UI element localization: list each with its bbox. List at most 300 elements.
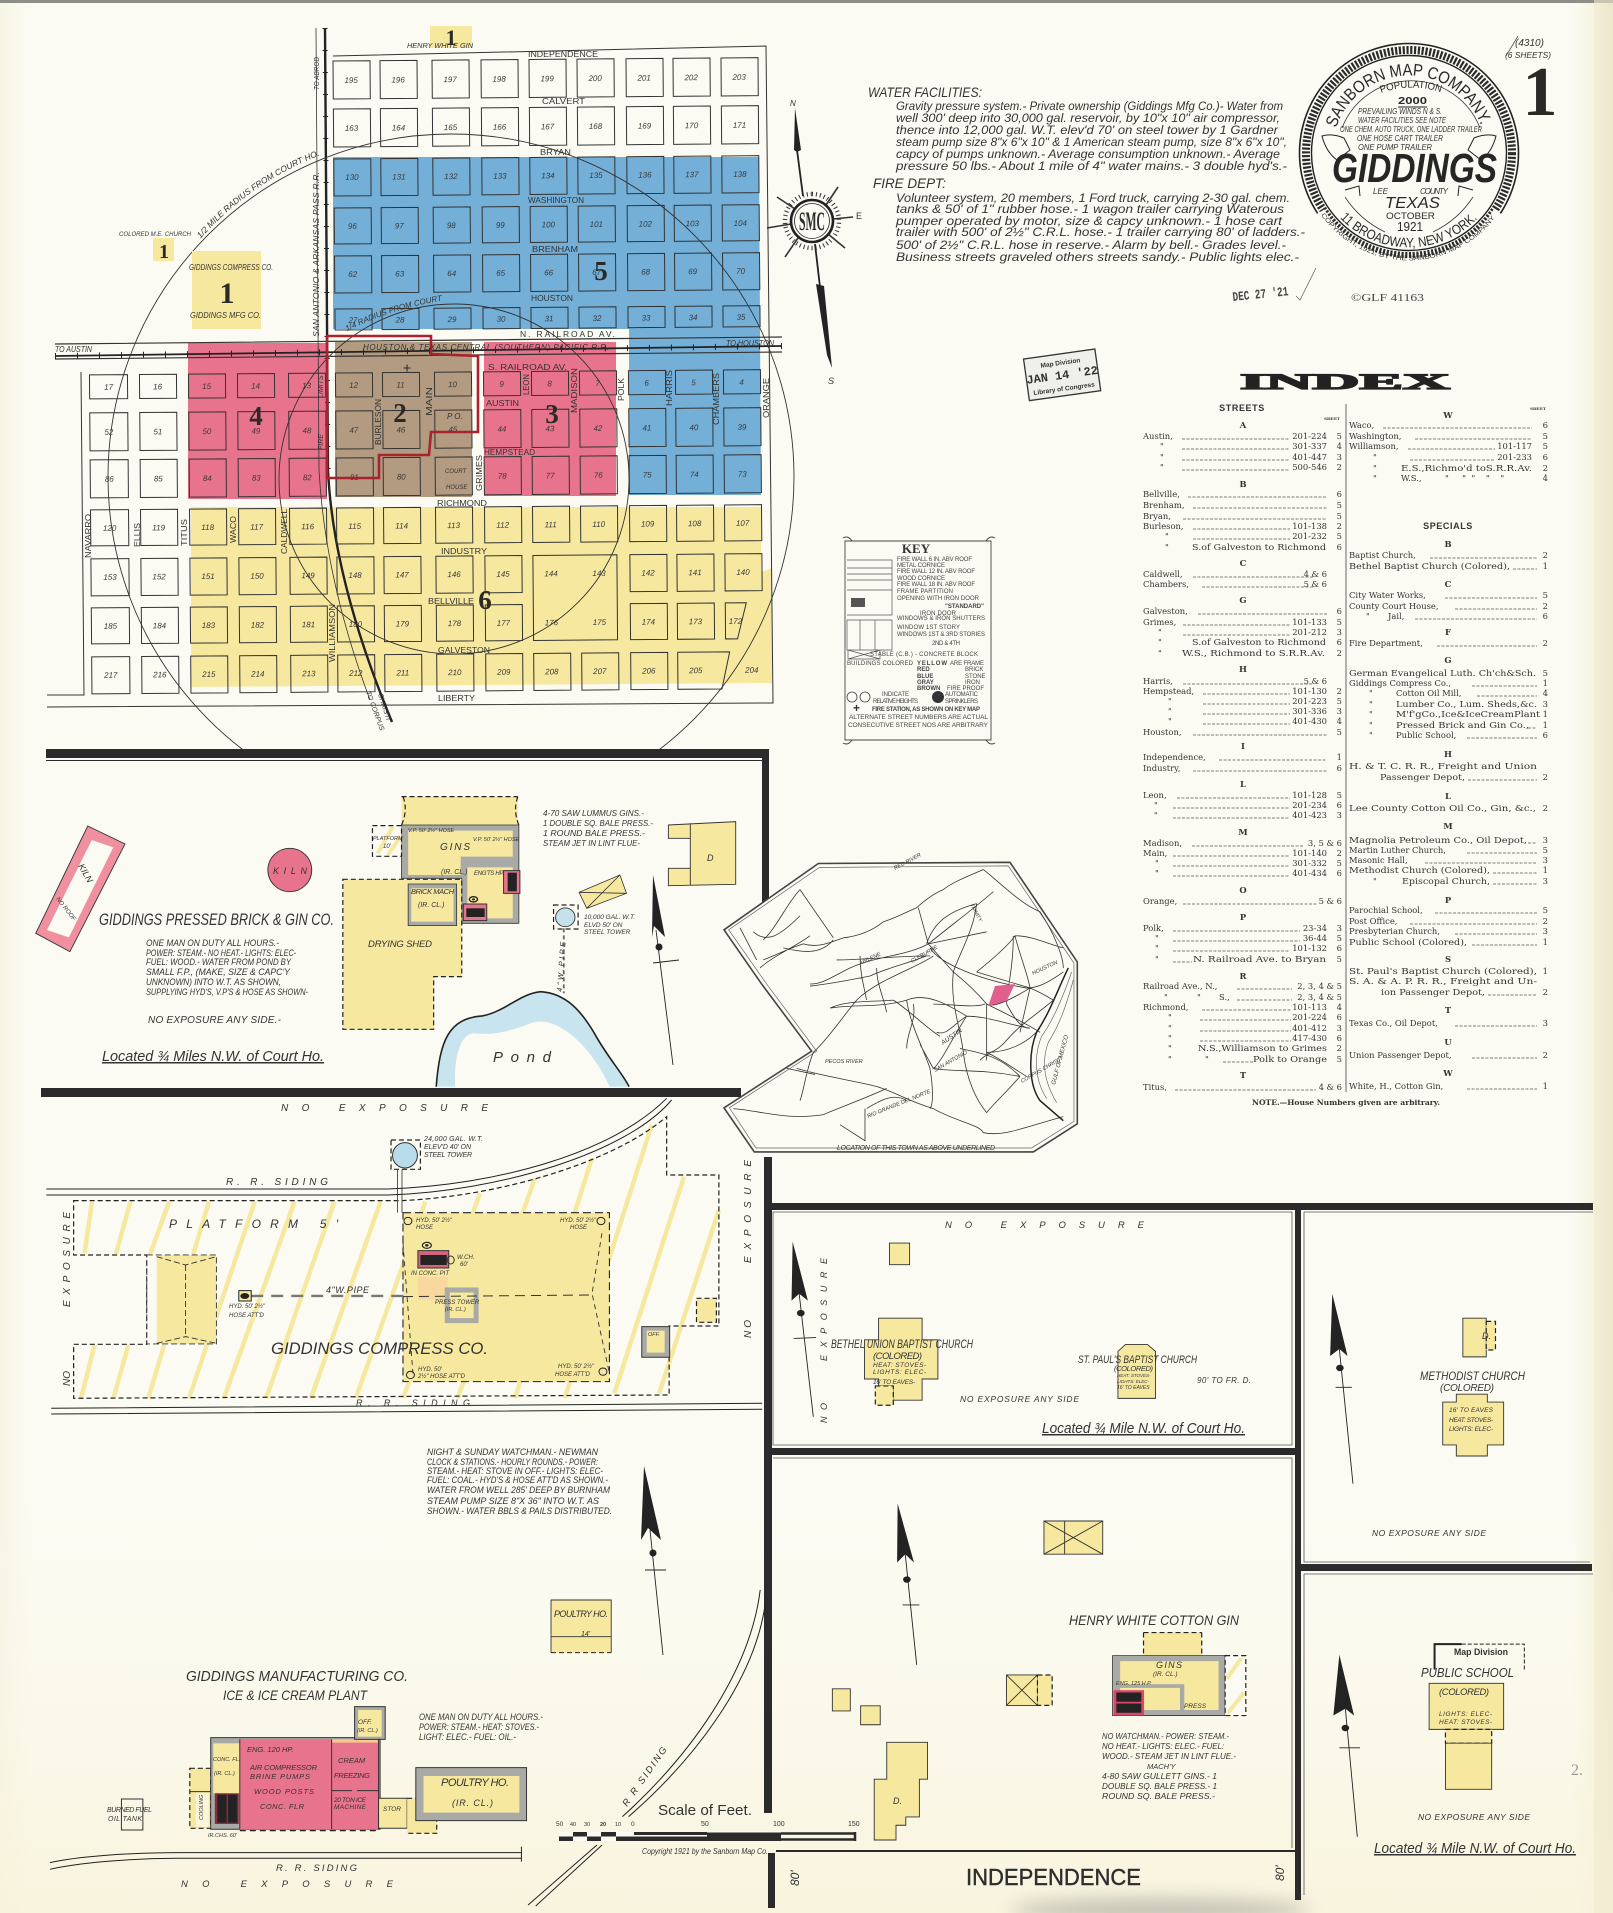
specials column: 2: [1543, 638, 1548, 648]
street names: BRYAN: [540, 147, 571, 157]
railway and radius labels: LIMITS: [318, 375, 325, 398]
block numbers: 173: [689, 617, 703, 626]
streets column: 5: [1337, 511, 1342, 521]
texas locator map: CLEBURNE: [910, 944, 939, 965]
compress labels: 2½" HOSE ATT'D: [417, 1373, 466, 1380]
streets column: Brenham,: [1143, 500, 1184, 510]
block numbers: 81: [350, 473, 359, 482]
specials column: 2: [1543, 772, 1548, 782]
streets column: G: [1239, 595, 1247, 605]
compass and north arrow: N: [790, 99, 796, 108]
streets column: 401-412: [1292, 1023, 1327, 1033]
specials column: W: [1442, 1068, 1453, 1078]
compress labels: HYD. 50': [418, 1367, 443, 1373]
gin labels: KILN: [273, 866, 308, 876]
streets column: H: [1239, 664, 1247, 674]
block numbers: 132: [444, 172, 458, 181]
specials column: 2: [1543, 916, 1548, 926]
block numbers: 41: [642, 424, 651, 433]
street names: INDUSTRY: [441, 546, 487, 556]
church and gin labels: D.: [1482, 1331, 1491, 1341]
key legend: STONE: [965, 674, 986, 680]
streets column: Leon,: [1143, 790, 1167, 800]
street names: WACO: [228, 516, 238, 543]
compress labels: EXPOSURE: [743, 1160, 754, 1263]
church and gin labels: 4-80 SAW GULLETT GINS.- 1: [1102, 1771, 1217, 1781]
block numbers: 183: [202, 621, 216, 630]
specials column: Bethel Baptist Church (Colored),: [1349, 561, 1510, 571]
church and gin labels: NO EXPOSURE ANY SIDE: [960, 1394, 1079, 1404]
block numbers: 29: [447, 315, 457, 324]
key legend: BROWN: [917, 686, 940, 692]
streets column: 5: [1337, 858, 1342, 868]
compress labels: FUEL: COAL.- HYD'S & HOSE ATT'D AS SHOWN.-: [427, 1475, 608, 1485]
specials column: ": [1369, 720, 1373, 730]
gin labels: D: [707, 853, 714, 863]
streets column: ": [1155, 868, 1159, 878]
block numbers: 83: [252, 474, 261, 483]
key legend: ALTERNATE STREET NUMBERS ARE ACTUAL: [849, 714, 988, 721]
streets column: ": [1168, 1012, 1172, 1022]
block numbers: 7: [595, 379, 600, 388]
block numbers: 206: [641, 666, 656, 676]
block numbers: 8: [547, 379, 552, 388]
church and gin labels: 90' TO FR. D.: [1197, 1376, 1251, 1385]
library stamp: Map Division: [1040, 357, 1081, 370]
numbered blocks: [87, 58, 763, 694]
water facilities and fire department notes: steam pump size 8"x 6"x 10" & 1 American steam pump, size 8"x 6"x 10",: [896, 137, 1287, 149]
compress labels: WATER FROM WELL 285' DEEP BY BURNHAM: [427, 1485, 610, 1495]
gin buildings: [36, 797, 736, 1087]
block numbers: 179: [396, 619, 410, 629]
title cartouche: GIDDINGS: [1332, 145, 1497, 191]
index heading: INDEX: [1240, 369, 1450, 394]
plant labels: BRINE PUMPS: [250, 1772, 310, 1781]
plant labels: 14': [581, 1631, 591, 1638]
streets column: 5: [1337, 500, 1342, 510]
streets column: ": [1205, 1054, 1209, 1064]
outlying sheet references: GIDDINGS COMPRESS CO.: [189, 263, 273, 272]
church and gin labels: 16' TO EAVES: [1449, 1407, 1494, 1414]
key legend: ARE FRAME: [950, 661, 984, 667]
plant labels: WOOD POSTS: [254, 1787, 314, 1796]
streets column: 4 & 6: [1304, 569, 1327, 579]
church and gin labels: LIGHTS: ELEC-: [1449, 1426, 1494, 1433]
fire limits boundary: [327, 336, 478, 478]
title cartouche: ONE PUMP TRAILER: [1358, 142, 1432, 152]
index footnote: NOTE.—House Numbers given are arbitrary.: [1252, 1098, 1440, 1107]
specials column: Episcopal Church,: [1402, 876, 1490, 886]
block numbers: 104: [734, 219, 748, 228]
church and gin labels: (COLORED): [873, 1351, 922, 1362]
railway and radius labels: TO ABROD: [312, 57, 321, 90]
block numbers: 113: [447, 521, 461, 530]
water facilities and fire department notes: trailer with 500' of 2½" C.R.L. hose.- 1 trailer carrying 80' of ladders.-: [896, 227, 1305, 239]
plant labels: R. R. SIDING: [276, 1863, 357, 1874]
streets column: S.of Galveston to Richmond: [1192, 637, 1327, 647]
plant labels: ONE MAN ON DUTY ALL HOURS.-: [419, 1712, 543, 1722]
block numbers: 108: [688, 519, 702, 528]
block numbers: 13: [302, 381, 312, 390]
compress drawing: [46, 1098, 762, 1414]
specials column: Washington,: [1349, 431, 1401, 441]
church and gin labels: Located ¾ Mile N.W. of Court Ho.: [1042, 1420, 1245, 1437]
compress labels: IN CONC. PIT: [411, 1271, 450, 1277]
key legend: BRICK: [965, 667, 983, 673]
block numbers: 142: [641, 568, 655, 578]
church and gin labels: HEAT: STOVES-: [1449, 1417, 1494, 1424]
gin labels: STEAM JET IN LINT FLUE-: [543, 838, 640, 848]
streets column: 101-133: [1292, 617, 1327, 627]
plant labels: IR.CHS. 60': [208, 1833, 238, 1839]
specials column: 5: [1543, 441, 1548, 451]
block numbers: 30: [497, 315, 506, 324]
specials column: 2: [1543, 601, 1548, 611]
streets column: Madison,: [1143, 838, 1182, 848]
streets column: 4: [1337, 716, 1342, 726]
church and gin labels: HEAT: STOVES-: [873, 1362, 927, 1369]
specials column: S: [1445, 954, 1451, 964]
plant labels: OFF.: [358, 1719, 372, 1726]
texas locator map: LOCATION OF THIS TOWN AS ABOVE UNDERLINED: [837, 1145, 995, 1152]
plant labels: 20 TON ICE: [333, 1797, 367, 1804]
plant labels: CONC. FLR: [260, 1802, 305, 1811]
block numbers: 114: [395, 521, 409, 531]
outlying sheet references: [119, 25, 474, 329]
block numbers: 49: [251, 427, 261, 436]
block numbers: 74: [690, 470, 699, 479]
block numbers: 134: [541, 171, 555, 180]
key legend: FIRE WALL 18 IN. ABV ROOF: [897, 582, 975, 588]
street names: LIBERTY: [438, 693, 475, 703]
streets column: ": [1154, 800, 1158, 810]
plant labels: CONC. FL.: [213, 1757, 240, 1763]
block numbers: 42: [593, 424, 603, 433]
block numbers: 107: [736, 519, 750, 528]
streets column: ": [1168, 706, 1172, 716]
water facilities and fire department notes: FIRE DEPT:: [873, 175, 946, 191]
title cartouche: COUNTY: [1420, 187, 1449, 196]
sheet number and count: (4310): [1515, 38, 1544, 49]
key legend: STABLE (C.B.) - CONCRETE BLOCK: [870, 652, 978, 658]
key legend: OPENING WITH IRON DOOR: [897, 596, 980, 602]
block numbers: 118: [201, 523, 215, 532]
streets column: 101-132: [1292, 943, 1327, 953]
specials column: P: [1445, 895, 1452, 905]
specials column: 3: [1543, 835, 1548, 845]
streets column: Main,: [1143, 848, 1167, 858]
street names: HEMPSTEAD: [484, 447, 535, 457]
title cartouche: WATER FACILITIES SEE NOTE: [1358, 115, 1446, 125]
sheet numerals: 3: [545, 399, 559, 429]
specials column: Pressed Brick and Gin Co.,: [1396, 720, 1529, 730]
plant labels: GIDDINGS MANUFACTURING CO.: [186, 1668, 408, 1685]
block numbers: 97: [395, 221, 404, 231]
streets column: 401-423: [1292, 810, 1327, 820]
church and gin labels: 80': [788, 1870, 802, 1886]
specials column: White, H., Cotton Gin,: [1349, 1081, 1443, 1091]
street names: S. RAILROAD AV.: [488, 362, 567, 372]
streets column: 6: [1337, 637, 1342, 647]
specials column: U: [1444, 1037, 1452, 1047]
street and railway lines: [47, 28, 782, 707]
water facilities and fire department notes: Gravity pressure system.- Private ownership (Giddings Mfg Co.)- Water from: [896, 101, 1283, 113]
street names: ELLIS: [132, 523, 142, 547]
streets column: 301-332: [1292, 858, 1327, 868]
scale of feet: 10: [615, 1822, 621, 1828]
streets column: 201-212: [1292, 627, 1327, 637]
key legend: YELLOW: [917, 661, 947, 667]
streets column: Grimes,: [1143, 617, 1176, 627]
railway and radius labels: CHRISTI: [376, 692, 391, 721]
church and gin labels: EXPOSURE: [819, 1257, 829, 1361]
block numbers: 144: [544, 569, 558, 578]
specials column: 5: [1543, 431, 1548, 441]
compress labels: STEAM PUMP SIZE 8"X 36" INTO W.T. AS: [427, 1496, 599, 1506]
streets column: S.,: [1219, 992, 1230, 1002]
street names: BRENHAM: [532, 244, 578, 254]
streets column: 301-336: [1292, 706, 1327, 716]
streets column: 6: [1337, 868, 1342, 878]
specials column: ": [1369, 730, 1373, 740]
streets column: ": [1168, 1023, 1172, 1033]
streets column: 3: [1337, 923, 1342, 933]
block numbers: 137: [685, 170, 699, 179]
streets column: 3: [1337, 1023, 1342, 1033]
block numbers: 215: [201, 670, 216, 679]
block numbers: 28: [395, 315, 405, 325]
compress labels: ELEV'D 40' ON: [424, 1144, 472, 1151]
streets column: 6: [1337, 542, 1342, 552]
water facilities and fire department notes: WATER FACILITIES:: [868, 84, 982, 100]
block numbers: 80: [397, 472, 406, 482]
block numbers: 111: [545, 520, 557, 529]
block numbers: 102: [639, 219, 653, 229]
streets column: 101-130: [1292, 686, 1327, 696]
library stamp: [1024, 349, 1101, 401]
outlying sheet references: 1: [220, 277, 234, 310]
streets column: 4: [1337, 441, 1342, 451]
streets column: P: [1240, 912, 1247, 922]
plant labels: BURNED FUEL: [107, 1807, 152, 1814]
block numbers: 202: [683, 73, 698, 82]
specials column: 3: [1543, 855, 1548, 865]
scale of feet: 30: [584, 1822, 590, 1828]
block numbers: 103: [686, 219, 700, 228]
texas locator map: PECOS RIVER: [825, 1059, 863, 1065]
streets column: ": [1155, 858, 1159, 868]
specials column: 201-233: [1497, 452, 1532, 462]
gin labels: 4-70 SAW LUMMUS GINS.-: [543, 808, 644, 818]
block numbers: 180: [349, 620, 363, 629]
specials column: 2: [1543, 550, 1548, 560]
block numbers: 152: [152, 572, 166, 581]
compress labels: R. R. SIDING: [356, 1398, 470, 1408]
specials column: Passenger Depot,: [1380, 772, 1465, 782]
plant labels: AIR COMPRESSOR: [249, 1763, 318, 1772]
compress labels: EXPOSURE: [62, 1212, 73, 1307]
specials column: Waco,: [1349, 420, 1374, 430]
block numbers: 203: [731, 73, 746, 82]
plant labels: OIL TANK: [108, 1816, 142, 1823]
sheet numerals: 6: [478, 585, 492, 615]
streets column: Austin,: [1142, 431, 1173, 441]
sheet numerals: 2: [393, 398, 407, 428]
railway and radius labels: TO CORPUS: [364, 690, 385, 732]
streets column: 6: [1337, 489, 1342, 499]
panel: churches and gin buildings: [788, 1220, 1583, 1890]
streets column: 201-223: [1292, 696, 1327, 706]
streets column: ": [1155, 954, 1159, 964]
streets column: 4 & 6: [1319, 1082, 1342, 1092]
block numbers: 85: [154, 474, 163, 483]
specials column: Lumber Co., Lum. Sheds,&c.: [1396, 699, 1537, 709]
key legend: WINDOW 1ST STORY: [897, 625, 960, 631]
streets column: R: [1240, 971, 1248, 981]
specials column: City Water Works,: [1349, 590, 1426, 600]
streets column: 5: [1337, 431, 1342, 441]
church and gin labels: HEAT: STOVES-: [1439, 1719, 1493, 1726]
gin labels: V.P. 50' 2½" HOSE: [473, 836, 520, 843]
streets column: ": [1164, 992, 1168, 1002]
church and gin labels: WOOD.- STEAM JET IN LINT FLUE.-: [1102, 1751, 1236, 1761]
streets column: Orange,: [1143, 896, 1177, 906]
block numbers: 62: [348, 270, 358, 279]
block numbers: 101: [590, 220, 603, 229]
key legend: FRAME PARTITION: [897, 589, 953, 595]
scale of feet: [556, 1802, 860, 1856]
water facilities and fire department notes: thence into 12,000 gal. W.T. elev'd 70' on steel tower by 1 Gardner: [896, 125, 1279, 137]
specials column: Williamson,: [1349, 441, 1399, 451]
date and copyright stamps: ©GLF 41163: [1351, 293, 1424, 304]
compress labels: STEEL TOWER: [424, 1152, 472, 1159]
gin labels: FUEL: WOOD.- WATER FROM POND BY: [146, 957, 292, 967]
date and copyright stamps: [1232, 268, 1424, 305]
block numbers: 44: [497, 425, 507, 434]
specials column: H: [1444, 749, 1452, 759]
compress labels: HOSE ATT'D: [555, 1372, 590, 1378]
block numbers: 213: [301, 669, 316, 678]
plant labels: MACHINE: [334, 1804, 367, 1811]
specials column: B: [1444, 539, 1452, 549]
streets column: S.of Galveston to Richmond: [1192, 542, 1327, 552]
specials column: Public School,: [1396, 730, 1456, 740]
block numbers: 136: [638, 170, 652, 180]
specials column: M: [1443, 821, 1453, 831]
block numbers: 52: [104, 428, 114, 437]
block numbers: 75: [643, 471, 652, 480]
compress labels: 60': [460, 1262, 469, 1268]
church and gin labels: (COLORED): [1439, 1687, 1489, 1698]
block numbers: 178: [448, 619, 462, 628]
church and gin labels: D.: [893, 1796, 902, 1806]
key legend: WINDOWS 1ST & 3RD STORIES: [897, 632, 985, 638]
specials column: F: [1445, 627, 1451, 637]
texas locator map: GULF OF MEXICO: [1051, 1034, 1070, 1086]
compass and north arrow: S: [828, 376, 834, 386]
block numbers: 17: [104, 383, 114, 392]
plant labels: (IR. CL.): [357, 1728, 378, 1734]
block numbers: 116: [301, 522, 315, 531]
specials column: G: [1444, 655, 1452, 665]
cartouche scrolls: [1322, 135, 1496, 196]
block numbers: 31: [545, 314, 554, 323]
streets column: L: [1240, 779, 1246, 789]
streets column: ": [1168, 1033, 1172, 1043]
scale of feet: 150: [848, 1821, 860, 1828]
library stamp: JAN 14 '22: [1026, 364, 1099, 388]
block numbers: 117: [250, 523, 264, 532]
specials column: 2: [1543, 463, 1548, 473]
church and gin labels: ENG. 125 H.P.: [1116, 1681, 1152, 1687]
block numbers: 15: [202, 382, 212, 391]
scale of feet: 20: [600, 1822, 606, 1828]
streets column: C: [1240, 558, 1247, 568]
street names: HARRIS: [664, 370, 674, 406]
scale of feet: 50: [701, 1821, 709, 1828]
plant labels: ENG. 120 HP.: [247, 1745, 294, 1754]
block numbers: 27: [348, 316, 358, 325]
streets column: ": [1155, 943, 1159, 953]
north arrows: [792, 1242, 1360, 1837]
streets column: Railroad Ave., N.,: [1143, 981, 1217, 991]
streets column: ": [1197, 992, 1201, 1002]
block numbers: 150: [250, 572, 264, 581]
church and gin labels: METHODIST CHURCH: [1420, 1369, 1525, 1383]
gin labels: SUPPLYING HYD'S, V.P'S & HOSE AS SHOWN-: [146, 987, 308, 997]
key frame with corner ornaments: [845, 541, 991, 740]
streets column: 101-138: [1292, 521, 1327, 531]
shaft and arrow: [794, 108, 801, 152]
block numbers: 199: [540, 74, 554, 83]
cartouche text: SANBORN MAP COMPANY.: [1326, 64, 1491, 126]
specials column: ": [1373, 876, 1377, 886]
church and gin labels: 16' TO EAVES: [1117, 1385, 1150, 1391]
block numbers: 69: [688, 267, 698, 276]
title cartouche: OCTOBER: [1386, 211, 1435, 222]
title cartouche: 1921: [1397, 220, 1423, 234]
streets column: ": [1168, 716, 1172, 726]
scale of feet: 0: [631, 1821, 635, 1828]
streets column: Houston,: [1143, 727, 1182, 737]
gin labels: UNKNOWN) INTO W.T. AS SHOWN,: [146, 977, 281, 987]
church and gin labels: 80': [1273, 1865, 1287, 1881]
specials column: 1: [1543, 865, 1548, 875]
block numbers: 135: [589, 171, 603, 180]
streets column: 5: [1337, 790, 1342, 800]
block numbers: 68: [641, 268, 651, 277]
street names: [83, 49, 771, 703]
key legend: 2ND & 4TH: [932, 641, 960, 647]
gin labels: (IR. CL.): [441, 869, 467, 876]
block numbers: 82: [303, 473, 312, 482]
block numbers: 174: [642, 617, 656, 627]
gin labels: SMALL F.P., (MAKE, SIZE & CAPC'Y: [146, 967, 291, 977]
map frame lines: [41, 749, 1593, 1908]
block numbers: 148: [348, 571, 362, 580]
block numbers: 99: [496, 221, 505, 230]
gin labels: V.P. 50' 2½" HOSE: [408, 827, 455, 834]
streets column: 23-34: [1303, 923, 1327, 933]
church and gin labels: (IR. CL.): [1153, 1671, 1178, 1678]
streets column: ": [1155, 933, 1159, 943]
compress labels: PLATFORM 5': [169, 1217, 339, 1231]
streets column: ": [1165, 531, 1169, 541]
specials column: 6: [1543, 420, 1548, 430]
block numbers: 175: [593, 618, 607, 627]
street names: MAIN: [424, 387, 434, 416]
texas locator map: ABILENE: [857, 951, 882, 967]
